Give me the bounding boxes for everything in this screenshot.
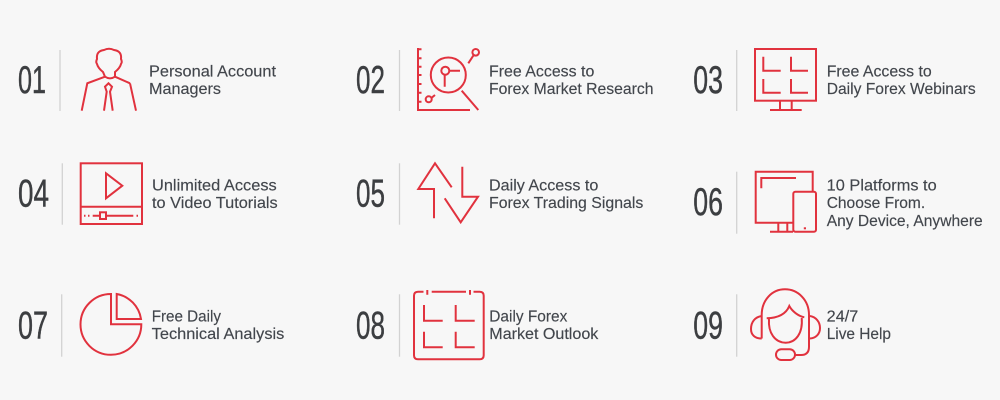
number 07: 07: [18, 304, 48, 347]
label: live help: [827, 309, 891, 343]
label: platforms: [827, 178, 983, 230]
icon: monitor and phone: [756, 172, 816, 232]
label: market outlook: [489, 309, 599, 343]
label: market research: Forex Market Research: [489, 81, 654, 98]
icon: video player: [81, 163, 142, 224]
icon: chart with magnifier: [418, 48, 479, 110]
panel: 01 personal account managers: [18, 49, 277, 111]
icon: person with tie: [82, 49, 136, 111]
number 03: 03: [693, 59, 723, 102]
panel: 03 webinars: [693, 49, 976, 111]
label: personal account managers: Personal Account: [149, 64, 277, 81]
panel: 07 technical analysis: [18, 294, 284, 357]
label: video tutorials: to Video Tutorials: [152, 195, 278, 212]
label: technical analysis: Technical Analysis: [152, 326, 284, 343]
label: webinars: [827, 64, 976, 98]
label: live help: 24/7: [827, 309, 858, 326]
label: technical analysis: [152, 309, 284, 343]
label: video tutorials: Unlimited Access: [152, 178, 277, 195]
label: trading signals: Forex Trading Signals: [489, 195, 643, 212]
label: webinars: Daily Forex Webinars: [827, 81, 976, 98]
number 02: 02: [356, 59, 385, 102]
label: market outlook: Daily Forex: [489, 309, 567, 326]
number 09: 09: [693, 304, 723, 347]
label: live help: Live Help: [827, 326, 891, 343]
panel: 09 live help: [693, 289, 891, 360]
icon: support agent headset: [751, 289, 820, 360]
label: market research: Free Access to: [489, 64, 594, 81]
label: webinars: Free Access to: [827, 64, 932, 81]
label: video tutorials: [152, 178, 278, 212]
label: market research: [489, 64, 654, 98]
panel: 08 market outlook: [356, 290, 599, 359]
panel: 06 platforms: [693, 172, 983, 234]
label: trading signals: [489, 178, 643, 212]
number 01: 01: [18, 59, 46, 102]
icon: up and down arrows: [418, 163, 478, 222]
label: market outlook: Market Outlook: [489, 326, 599, 343]
number 05: 05: [356, 173, 385, 216]
panel: 05 trading signals: [356, 163, 643, 225]
panel: 02 market research: [356, 48, 654, 111]
number 06: 06: [693, 181, 723, 224]
icon: calendar: [414, 290, 484, 359]
label: trading signals: Daily Access to: [489, 178, 598, 195]
number 04: 04: [18, 173, 49, 216]
panel: 04 video tutorials: [18, 163, 278, 225]
icon: monitor with grid: [755, 49, 816, 110]
icon: pie chart: [81, 294, 141, 355]
label: technical analysis: Free Daily: [152, 309, 221, 326]
label: platforms: Any Device, Anywhere: [827, 213, 983, 230]
label: platforms: 10 Platforms to: [827, 178, 937, 195]
label: personal account managers: [149, 64, 277, 98]
label: personal account managers: Managers: [149, 81, 221, 98]
number 08: 08: [356, 304, 385, 347]
label: platforms: Choose From.: [827, 195, 925, 212]
